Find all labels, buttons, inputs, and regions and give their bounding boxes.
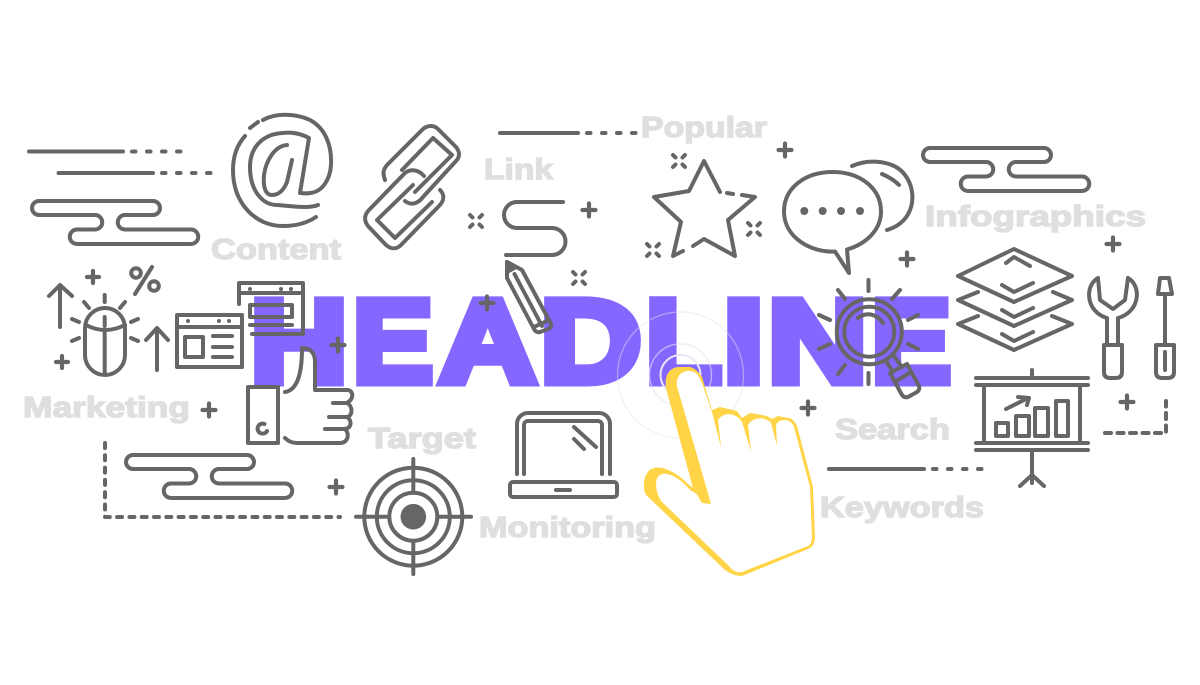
label: Marketing: Marketing xyxy=(23,392,190,424)
icon: speech bubbles xyxy=(784,162,912,273)
line: popular xyxy=(500,131,640,135)
icon: target xyxy=(356,459,471,574)
cloud: bottom left xyxy=(126,455,292,498)
label: Keywords: Keywords xyxy=(820,492,984,524)
hand index shadow xyxy=(667,385,711,504)
label: Link: Link xyxy=(484,154,554,186)
icon: pencil xyxy=(507,262,551,332)
speed lines: content xyxy=(29,152,214,173)
icon: percent xyxy=(131,267,159,294)
icon: screwdriver xyxy=(1156,278,1174,378)
icon: layers xyxy=(958,249,1072,350)
plus signs xyxy=(56,144,1134,494)
title: HEADLINE: I xyxy=(723,276,764,408)
cloud: top left xyxy=(32,201,198,244)
icon: at sign xyxy=(233,115,331,226)
dashed connector: right xyxy=(1105,401,1166,433)
icon: wrench xyxy=(1089,278,1137,378)
title: HEADLINE: A xyxy=(439,275,536,407)
icon: browser window partial xyxy=(239,283,303,334)
icon: mouse with rays xyxy=(72,295,138,375)
icon: arrow up left xyxy=(49,285,72,327)
icon: laptop xyxy=(510,413,617,497)
label: Content: Content xyxy=(211,234,341,266)
label: Infographics: Infographics xyxy=(925,201,1146,233)
line: keywords xyxy=(829,467,985,471)
icon: arrow up right xyxy=(146,328,168,370)
label: Popular: Popular xyxy=(641,112,767,144)
cloud: top right xyxy=(923,148,1089,191)
title: HEADLINE: D xyxy=(540,276,641,407)
icon: browser window xyxy=(177,315,242,367)
title: HEADLINE: E xyxy=(872,277,951,408)
icon: pointing hand xyxy=(644,367,815,576)
hand outline xyxy=(644,367,815,576)
icon: squiggle xyxy=(504,202,566,255)
title: HEADLINE xyxy=(250,275,951,408)
ripple circles xyxy=(618,312,744,438)
icon: magnifier xyxy=(819,280,919,397)
label: Search: Search xyxy=(835,414,950,446)
icon: thumbs up xyxy=(248,348,352,443)
icon: chain link xyxy=(365,126,459,248)
title: HEADLINE: N xyxy=(768,276,867,408)
hand body xyxy=(656,371,812,572)
sparkles xyxy=(470,155,760,284)
title: HEADLINE: H xyxy=(250,275,348,407)
label: Monitoring: Monitoring xyxy=(479,512,656,544)
dashed connector: left xyxy=(105,443,340,517)
title: HEADLINE: L xyxy=(646,275,722,407)
icon: star xyxy=(654,161,755,256)
icon: presentation board xyxy=(976,370,1088,486)
title: HEADLINE: E xyxy=(353,276,433,408)
label: Target: Target xyxy=(368,423,476,455)
